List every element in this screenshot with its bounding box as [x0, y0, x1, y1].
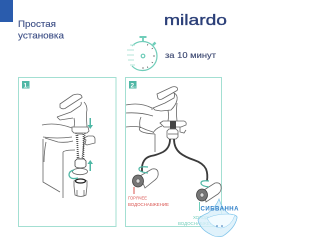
heading: установка — [18, 30, 65, 40]
logo: milardo: milardo — [164, 12, 227, 29]
blue corner block — [0, 0, 13, 22]
rotation arrows — [139, 167, 209, 187]
panel: step 2 — [126, 78, 222, 226]
watermark: Сибванна droplet: СИБВАННА — [200, 206, 239, 212]
badge: 2 — [129, 81, 136, 90]
faucet and hoses illustration — [126, 87, 186, 152]
label: hot water: ГОРЯЧЕЕ — [128, 196, 147, 200]
heading: Простая — [18, 18, 56, 29]
arrow: up — [88, 160, 93, 171]
icon: stopwatch — [127, 36, 157, 70]
heading — [18, 18, 65, 40]
valve: hot — [132, 169, 158, 188]
valve: cold — [196, 183, 221, 202]
badge: 1: 1. — [24, 82, 29, 90]
hoses — [142, 139, 207, 181]
watermark: Сибванна droplet — [198, 199, 239, 237]
badge: 2: 2. — [130, 82, 136, 90]
panel: step 1 — [18, 78, 116, 226]
label: hot water: ВОДОСНАБЖЕНИЕ — [128, 202, 169, 207]
badge: 1 — [22, 81, 30, 90]
label: cold water: ХОЛОДНОЕ — [193, 215, 217, 220]
label: hot water — [128, 187, 169, 207]
arrow: rotate — [69, 170, 78, 179]
duration text: за 10 минут — [165, 51, 216, 60]
label: cold water — [178, 202, 219, 226]
arrow: down — [88, 118, 93, 129]
faucet illustration — [42, 94, 95, 198]
label: cold water: ВОДОСНАБЖЕНИЕ — [178, 221, 219, 226]
